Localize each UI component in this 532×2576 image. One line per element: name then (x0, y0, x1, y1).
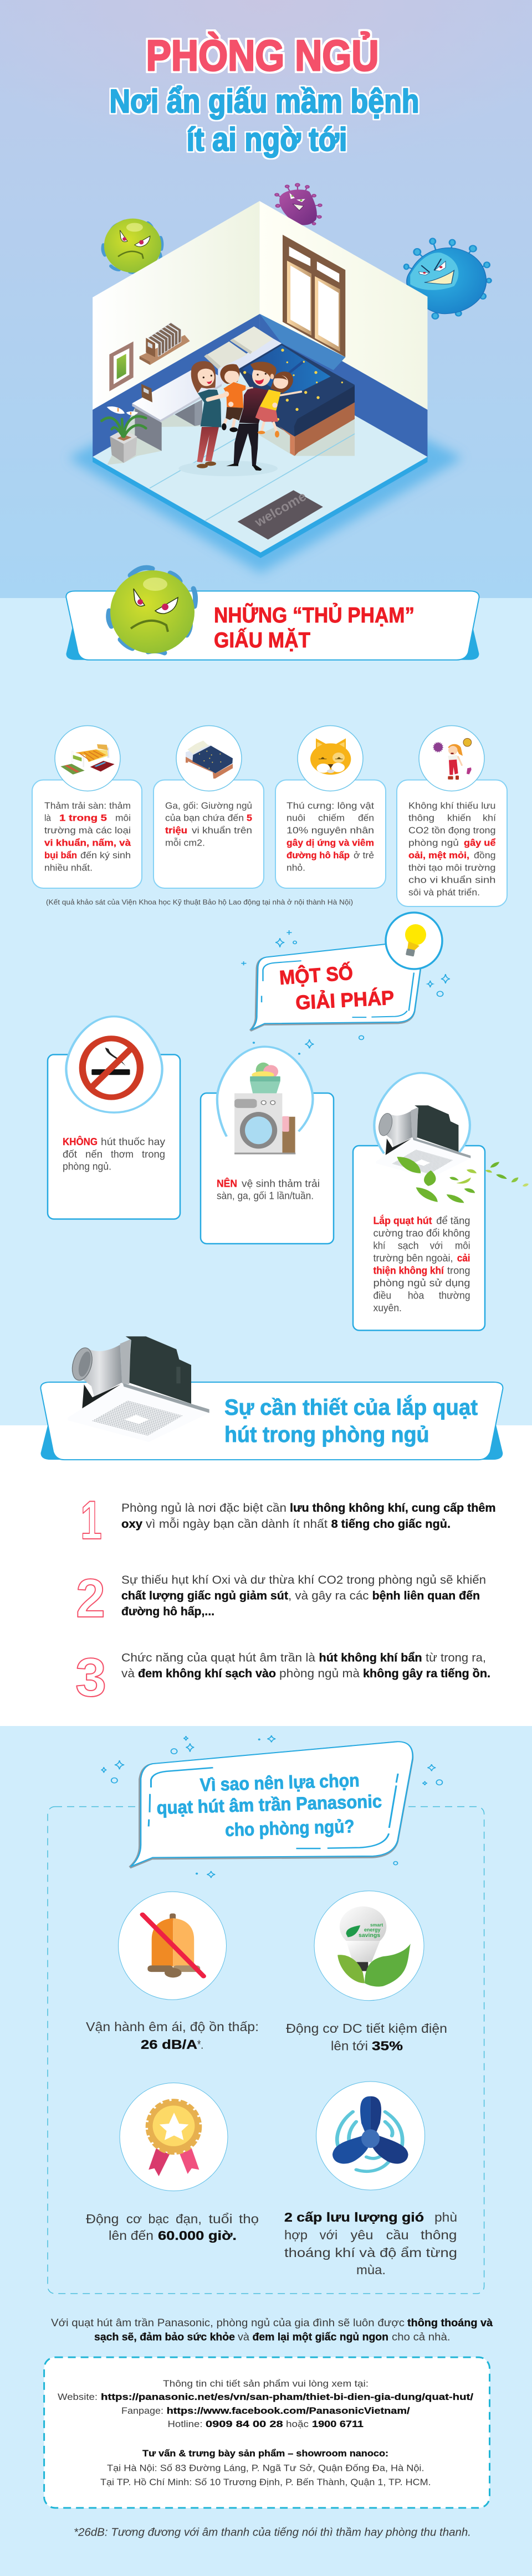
benefit: quiet: Vận hành êm ái, độ ồn thấp: (86, 2019, 259, 2034)
window (283, 235, 345, 357)
card: no smoking: hút thuốc hay (101, 1136, 165, 1147)
panel: contact info: 1900 6711 (312, 2419, 364, 2429)
card: stale air: khí (483, 813, 496, 823)
banner: sự cần thiết: hút trong phòng ngủ (224, 1423, 429, 1447)
card: no smoking: nến (85, 1149, 103, 1160)
floor lines (150, 433, 355, 521)
card: pets (275, 725, 386, 888)
panel: cause cards (32, 725, 507, 906)
card: stale air: oải, mệt mỏi, (408, 851, 469, 861)
card: carpet (32, 725, 142, 888)
benefit: two airflow levels: hợp (284, 2228, 308, 2242)
conclusion text: đem lại một giấc ngủ ngon (253, 2332, 388, 2343)
number 2: 2 (76, 1568, 105, 1629)
conclusion text: thông thoáng và (407, 2317, 493, 2329)
plant (101, 406, 146, 463)
card: pets: đến (358, 813, 374, 823)
light on wall band (259, 314, 345, 370)
card: ventilation fan: hòa (408, 1290, 424, 1301)
panel: dashed benefits box (48, 1807, 484, 2294)
floor shadow under family (178, 461, 278, 476)
icon: small green germ (103, 219, 162, 272)
picture frame (109, 342, 134, 391)
card: washing: sàn, ga, gối 1 lần/tuần. (217, 1191, 314, 1202)
family: boy (220, 364, 253, 432)
desk (132, 365, 229, 451)
background: lower light blue section (0, 1726, 532, 2576)
panel: contact info: Tại Hà Nội: Số 83 Đường Láng, P. Ngã Tư Sở, Quận Đống Đa, Hà Nội. (107, 2463, 424, 2474)
card: pets: nuôi (287, 813, 305, 823)
card: ventilation fan: thường (439, 1290, 470, 1301)
card: bedding: của bạn chứa đến (165, 813, 244, 823)
panel: contact info (44, 2357, 490, 2508)
card: stale air (397, 725, 507, 906)
icon: medal (148, 2101, 200, 2176)
card: ventilation fan (353, 1073, 529, 1330)
benefit: two airflow levels: thoáng khí và độ ẩm từng (284, 2245, 457, 2260)
benefit: quiet: *. (197, 2037, 203, 2052)
panel: contact info: Hotline: (167, 2419, 203, 2429)
card: carpet: Thảm trải sàn: thảm (44, 801, 131, 811)
floor edge (93, 457, 427, 558)
card: pets: 10% nguyên nhân (287, 826, 374, 836)
doormat text: welcome (252, 489, 309, 530)
card: no smoking: KHÔNG (63, 1136, 98, 1147)
banner: những thủ phạm giấu mặt: NHỮNG “THỦ PHẠM” (214, 603, 415, 627)
banner: sự cần thiết (40, 1382, 503, 1460)
reason 3: hút không khí bẩn (319, 1651, 422, 1664)
floor shadows (107, 408, 355, 465)
bed (204, 326, 355, 456)
card: ventilation fan: trong (447, 1265, 470, 1276)
card: ventilation fan: môi (455, 1240, 470, 1251)
card: carpet: vi khuẩn, nấm, và (44, 838, 131, 848)
card: stale air: CO2 tồn đọng trong (408, 826, 495, 836)
panel: contact info: 0909 84 00 28 (206, 2419, 283, 2429)
reason 1: Phòng ngủ là nơi đặc biệt cần (121, 1502, 287, 1514)
benefit: energy saving: energy (364, 1927, 381, 1933)
conclusion text: Với quạt hút âm trần Panasonic, phòng ngủ của gia đình sẽ luôn được (51, 2317, 405, 2329)
card: no smoking: phòng ngủ. (63, 1161, 111, 1172)
benefit: energy saving: lên tới (331, 2039, 368, 2053)
speech bubble: một số giải pháp: MỘT SỐ (279, 961, 354, 989)
title: PHÒNG NGỦ (146, 31, 379, 80)
title (110, 31, 419, 158)
source note: (Kết quả khảo sát của Viện Khoa học Kỹ thuật Bảo hộ Lao động tại nhà ở nội thành Hà Nội) (46, 898, 353, 906)
card: stale air: Không khí thiếu lưu (408, 801, 495, 811)
reason 2: chất lượng giấc ngủ giảm sút (121, 1589, 288, 1602)
icon: blue germ (404, 238, 491, 319)
benefit: long life: thọ (239, 2212, 259, 2226)
speech bubble: một số giải pháp: GIẢI PHÁP (295, 986, 395, 1014)
card: stale air: thời tạo môi trường (408, 863, 495, 873)
card: bedding: 5 (247, 813, 252, 823)
reason 2: đường hô hấp,... (121, 1605, 214, 1618)
reason 1: lưu thông không khí, cung cấp thêm (290, 1502, 495, 1514)
card: ventilation fan: phòng ngủ sử dụng (374, 1277, 470, 1289)
conclusion text: sạch sẽ, đảm bảo sức khỏe (94, 2332, 235, 2343)
card: ventilation fan: để tăng (436, 1215, 470, 1227)
card: stale air: sôi và phát triển. (408, 888, 480, 898)
background: top gradient (0, 0, 532, 598)
speech bubble: vì sao nên lựa chọn: Vì sao nên lựa chọn (200, 1770, 360, 1795)
reason 2: Sự thiếu hụt khí Oxi và dư thừa khí CO2 trong phòng ngủ sẽ khiến (121, 1574, 486, 1586)
conclusion text: và (238, 2332, 249, 2343)
reason 2: , và gây ra các (288, 1589, 369, 1602)
left wall band (93, 314, 259, 460)
card: carpet: đến ký sinh (80, 851, 131, 861)
card: ventilation fan: cải (457, 1253, 470, 1264)
card: carpet: 1 trong 5 (59, 813, 107, 823)
panel: contact info: Website: (58, 2392, 98, 2402)
right wall (259, 201, 427, 410)
reason 2 (121, 1574, 486, 1618)
card: carpet: nhiều nhất. (44, 863, 93, 873)
card: ventilation fan: điều (374, 1290, 391, 1301)
family: mother (191, 361, 226, 468)
benefit: two airflow levels: cầu (386, 2228, 409, 2242)
number 1: 1 (80, 1490, 102, 1550)
icon: fan (332, 2096, 408, 2171)
card: no smoking: đốt (63, 1149, 77, 1160)
card: bedding: vi khuẩn trên (192, 826, 252, 836)
reason 3: Chức năng của quạt hút âm trần là (121, 1651, 315, 1664)
panel: contact info: Fanpage: (121, 2405, 163, 2416)
card: pets: Thú cưng: lông vật (287, 801, 374, 811)
benefit: two airflow levels (284, 2082, 457, 2277)
benefit: two airflow levels: yêu (350, 2228, 374, 2242)
icon: energy bulb with leaves (337, 1907, 411, 1987)
icon: large green germ (109, 568, 196, 653)
panel: contact info: Tại TP. Hồ Chí Minh: Số 10 Trương Định, P. Bến Thành, Quận 1, TP. HCM. (100, 2477, 431, 2487)
card: no smoking: thơm (111, 1149, 134, 1160)
card: no smoking (48, 1017, 180, 1219)
reason 1: oxy (121, 1518, 142, 1531)
speech bubble: vì sao nên lựa chọn: cho phòng ngủ? (225, 1816, 355, 1840)
card: bedding: triệu (165, 826, 187, 836)
benefit: two airflow levels: mùa. (356, 2263, 386, 2277)
card: pets: đường hô hấp (287, 851, 350, 861)
number 3: 3 (75, 1647, 106, 1708)
reason 3: phòng ngủ mà (279, 1667, 360, 1680)
benefit: two airflow levels: với (320, 2228, 337, 2242)
benefit: energy saving: Động cơ DC tiết kiệm điện (286, 2021, 447, 2036)
benefit: two airflow levels: phù (434, 2210, 457, 2224)
speech bubble: vì sao nên lựa chọn: quạt hút âm trần Panasonic (156, 1791, 382, 1818)
background: light blue section (0, 598, 532, 1425)
left wall (93, 201, 259, 410)
icon: muted bell (142, 1914, 203, 1977)
banner: những thủ phạm giấu mặt (66, 591, 479, 660)
reason 3: đem không khí sạch vào (138, 1667, 276, 1680)
speech bubble: vì sao nên lựa chọn (101, 1735, 442, 1878)
background: white section (0, 1425, 532, 1726)
icon: purple germ (275, 183, 322, 225)
right wall band (259, 314, 427, 460)
room (93, 201, 427, 558)
benefit: long life: bạc (149, 2212, 169, 2226)
benefit: energy saving: 35% (372, 2039, 403, 2053)
benefit: energy saving: smart (370, 1922, 383, 1928)
shelf with books (140, 323, 190, 365)
card: pets: chiếm (318, 813, 345, 823)
card: washing (201, 1047, 334, 1244)
title: ít ai ngờ tới (186, 121, 347, 158)
card: ventilation fan: xuyên. (374, 1302, 402, 1313)
card: carpet: môi (115, 813, 131, 823)
card: stale air: gây uể (464, 838, 495, 848)
card: bedding (154, 725, 264, 888)
card: pets: gây dị ứng và viêm (287, 838, 374, 848)
card: pets: nhỏ. (287, 863, 305, 873)
family: girl (255, 372, 301, 437)
benefit: long life: Động (86, 2212, 119, 2226)
card: carpet: là (44, 813, 52, 823)
card: carpet: bụi bẩn (44, 851, 77, 861)
illustration: bedroom with germs (68, 183, 491, 573)
title: Nơi ẩn giấu mầm bệnh (110, 83, 419, 120)
benefit: energy saving: savings (359, 1932, 380, 1939)
panel: contact info: Thông tin chi tiết sản phẩm vui lòng xem tại: (163, 2378, 369, 2389)
banner: sự cần thiết: Sự cần thiết của lắp quạt (224, 1394, 478, 1420)
card: ventilation fan: với (430, 1240, 443, 1251)
benefit: energy saving (286, 1891, 447, 2053)
conclusion text: cho cả nhà. (392, 2332, 450, 2343)
benefit: long life: 60.000 giờ. (158, 2228, 237, 2243)
card: ventilation fan: sạch (398, 1240, 419, 1251)
floor (93, 361, 427, 553)
banner: những thủ phạm giấu mặt: GIẤU MẶT (214, 628, 310, 652)
card: ventilation fan: trường bên ngoài, (374, 1253, 453, 1264)
panel: contact info: Tư vấn & trưng bày sản phẩm – showroom nanoco: (142, 2448, 388, 2459)
card: ventilation fan: khí (374, 1240, 386, 1251)
icon: light bulb (386, 913, 442, 969)
benefit: quiet (86, 1892, 259, 2052)
reason 1 (121, 1502, 495, 1531)
card: ventilation fan: Lắp quạt hút (374, 1215, 432, 1227)
card: bedding: mỗi cm2. (165, 837, 205, 848)
card: ventilation fan: cường trao đổi không (374, 1228, 470, 1239)
icon: leaves (397, 1157, 529, 1203)
card: ventilation fan: thiện không khí (374, 1265, 444, 1276)
card: bedding: Ga, gối: Giường ngủ (165, 801, 252, 811)
floor glow (68, 356, 463, 573)
benefit: long life: cơ (126, 2212, 142, 2226)
benefit: two airflow levels: 2 cấp lưu lượng gió (284, 2210, 424, 2224)
card: carpet: trường mà các loại (44, 826, 131, 836)
panel: contact info: hoặc (286, 2419, 309, 2429)
card: pets: ở trẻ (354, 851, 374, 861)
doormat (238, 490, 323, 539)
reason 3 (121, 1651, 490, 1680)
card: washing: vệ sinh thảm trải (242, 1178, 320, 1189)
benefit: long life: lên đến (109, 2228, 154, 2243)
icon: small fan product (376, 1105, 470, 1178)
benefit: long life: tuổi (208, 2212, 233, 2226)
card: washing: NÊN (217, 1177, 237, 1189)
card: stale air: thông (408, 813, 434, 823)
reason 1: vì mỗi ngày bạn cần dành ít nhất (146, 1518, 328, 1531)
reason 1: 8 tiếng cho giấc ngủ. (331, 1518, 451, 1531)
panel: contact info: https://www.facebook.com/PanasonicVietnam/ (167, 2405, 410, 2416)
family: father (226, 362, 277, 471)
icon: ceiling fan product (68, 1336, 209, 1442)
card: no smoking: trong (142, 1149, 165, 1160)
speech bubble: một số giải pháp (241, 930, 450, 1054)
room details (101, 314, 355, 521)
benefit: long life: đạn, (176, 2212, 202, 2226)
benefit: long life (86, 2083, 259, 2243)
benefit: two airflow levels: thông (421, 2228, 457, 2242)
reason 3: và (121, 1667, 135, 1680)
card: stale air: cho vi khuẩn sinh (408, 875, 495, 885)
panel: contact info: https://panasonic.net/es/vn/san-pham/thiet-bi-dien-gia-dung/quat-hut/ (101, 2392, 473, 2402)
conclusion text (51, 2317, 493, 2343)
reason 3: từ trong ra, (426, 1651, 486, 1664)
benefit: quiet: 26 dB/A (141, 2037, 197, 2052)
footnote: *26dB: Tương đương với âm thanh của tiếng nói thì thầm hay phòng thu thanh. (74, 2527, 471, 2539)
reason 3: không gây ra tiếng ồn. (363, 1667, 490, 1680)
card: stale air: đồng (474, 851, 495, 861)
card: stale air: phòng ngủ (408, 838, 459, 848)
list: reasons (75, 1490, 495, 1708)
reason 2: bệnh liên quan đến (372, 1589, 480, 1602)
card: stale air: khiến (447, 813, 471, 823)
